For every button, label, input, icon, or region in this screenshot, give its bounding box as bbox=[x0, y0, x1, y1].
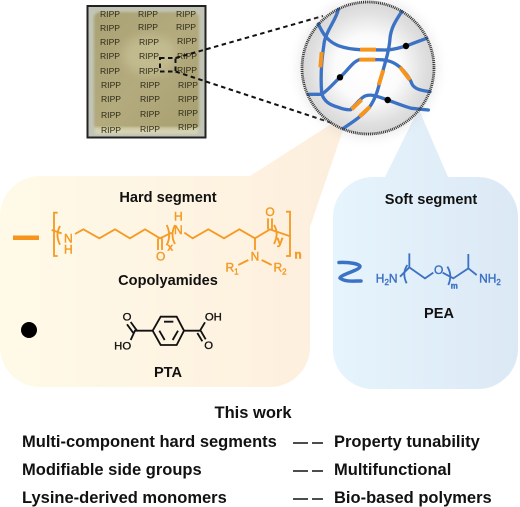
chemical structure: copolyamides: 1 bbox=[234, 267, 239, 276]
text row: hard segments to tunability bbox=[22, 433, 481, 451]
chemical structure: PEA: 2 bbox=[496, 278, 501, 287]
RIPP print grid bbox=[100, 9, 198, 135]
chemical structure: copolyamides: O bbox=[265, 205, 275, 219]
RIPP print grid: RIPP bbox=[140, 109, 160, 119]
RIPP print grid: RIPP bbox=[138, 9, 158, 19]
text row: hard segments to tunability: Multi-component hard segments bbox=[22, 433, 277, 451]
chemical structure: PEA bbox=[376, 253, 501, 291]
label: PEA: PEA bbox=[424, 306, 454, 322]
RIPP print grid: RIPP bbox=[178, 94, 198, 104]
chemical structure: PEA: H bbox=[376, 272, 384, 286]
RIPP print grid: RIPP bbox=[176, 22, 196, 32]
icon: orange hard segment bar bbox=[13, 236, 39, 240]
RIPP print grid: RIPP bbox=[139, 37, 159, 47]
chemical structure: copolyamides: R bbox=[273, 261, 282, 275]
chemical structure: copolyamides: N bbox=[64, 232, 73, 246]
RIPP print grid: RIPP bbox=[178, 122, 198, 132]
chemical structure: PEA: m bbox=[451, 282, 458, 291]
text row: lysine monomers to bio-based: Bio-based polymers bbox=[334, 489, 492, 507]
icon: black dot PTA bbox=[21, 322, 37, 338]
chemical structure: PEA: NH bbox=[479, 272, 496, 286]
RIPP print grid: RIPP bbox=[139, 51, 159, 61]
RIPP print grid: RIPP bbox=[138, 22, 158, 32]
RIPP print grid: RIPP bbox=[100, 37, 120, 47]
chemical structure: PTA: O bbox=[123, 312, 132, 324]
RIPP print grid: RIPP bbox=[100, 66, 120, 76]
chemical structure: copolyamides: H bbox=[174, 210, 183, 224]
chemical structure: PEA: N bbox=[389, 272, 398, 286]
RIPP print grid: RIPP bbox=[176, 9, 196, 19]
chemical structure: copolyamides bbox=[52, 205, 302, 276]
RIPP print grid: RIPP bbox=[178, 108, 198, 118]
chemical structure: PEA: 2 bbox=[384, 278, 389, 287]
chemical structure: copolyamides: H bbox=[64, 243, 73, 257]
text row: side groups to multifunctional bbox=[22, 461, 451, 479]
text row: lysine monomers to bio-based: Lysine-derived monomers bbox=[22, 489, 227, 507]
RIPP print grid: RIPP bbox=[100, 23, 120, 33]
RIPP print grid: RIPP bbox=[100, 51, 120, 61]
network: black PTA crosslink dots bbox=[337, 43, 409, 103]
chemical structure: copolyamides: R bbox=[225, 261, 234, 275]
RIPP print grid: RIPP bbox=[139, 66, 159, 76]
RIPP print grid: RIPP bbox=[178, 80, 198, 90]
label: PTA: PTA bbox=[154, 365, 183, 381]
network: orange hard segments bbox=[320, 50, 410, 117]
RIPP print grid: RIPP bbox=[101, 80, 121, 90]
photo: RIPP film sample bbox=[88, 6, 206, 138]
chemical structure: PTA: OH bbox=[205, 311, 222, 323]
RIPP print grid: RIPP bbox=[140, 94, 160, 104]
circle dashed border bbox=[302, 2, 434, 134]
text row: hard segments to tunability: Property tunability bbox=[334, 433, 481, 451]
panel: soft segment bbox=[333, 112, 518, 389]
RIPP print grid: RIPP bbox=[177, 51, 197, 61]
heading: this work: This work bbox=[214, 404, 292, 422]
chemical structure: copolyamides: N bbox=[174, 223, 183, 237]
RIPP print grid: RIPP bbox=[177, 65, 197, 75]
RIPP print grid: RIPP bbox=[140, 124, 160, 134]
network: blue soft chains bbox=[308, 9, 430, 128]
chemical structure: PEA: O bbox=[434, 263, 443, 277]
chemical structure: PTA: O bbox=[204, 340, 213, 352]
chemical structure: copolyamides: 2 bbox=[282, 267, 287, 276]
RIPP print grid: RIPP bbox=[140, 80, 160, 90]
RIPP print grid: RIPP bbox=[101, 110, 121, 120]
text row: lysine monomers to bio-based bbox=[22, 489, 492, 507]
RIPP print grid: RIPP bbox=[100, 9, 120, 19]
label: copolyamides: Copolyamides bbox=[118, 273, 218, 289]
icon: blue soft segment squiggle bbox=[339, 262, 361, 281]
heading: hard segment: Hard segment bbox=[119, 190, 217, 206]
chemical structure: PTA bbox=[114, 311, 222, 352]
chemical structure: copolyamides: N bbox=[251, 250, 259, 264]
panel: hard segment bbox=[0, 112, 350, 387]
diagram: polymer network circle bbox=[298, 0, 438, 138]
heading: soft segment: Soft segment bbox=[385, 192, 477, 208]
chemical structure: copolyamides: x bbox=[168, 242, 174, 253]
text row: side groups to multifunctional: Modifiable side groups bbox=[22, 461, 202, 479]
chemical structure: copolyamides: n bbox=[294, 248, 302, 262]
text row: side groups to multifunctional: Multifunctional bbox=[334, 461, 451, 479]
RIPP print grid: RIPP bbox=[101, 94, 121, 104]
RIPP print grid: RIPP bbox=[101, 125, 121, 135]
chemical structure: copolyamides: O bbox=[156, 250, 165, 264]
chemical structure: PTA: HO bbox=[114, 340, 131, 352]
chemical structure: copolyamides: y bbox=[277, 234, 284, 248]
RIPP print grid: RIPP bbox=[177, 36, 197, 46]
callout: dashed zoom box and guide lines bbox=[160, 16, 332, 123]
